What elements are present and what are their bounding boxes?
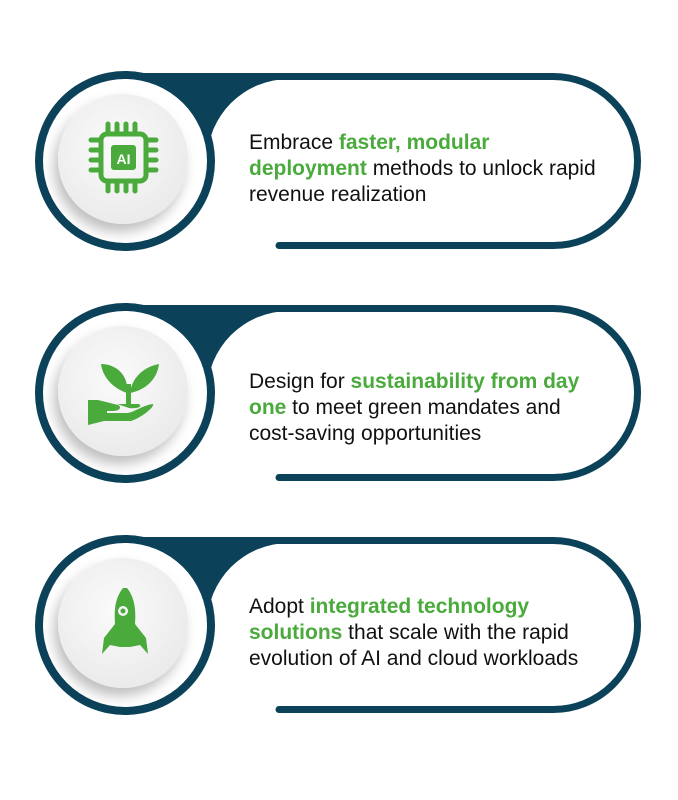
text 3 [249,595,578,670]
icon: AI chip [91,124,156,191]
text 2: Design for sustainability from day [249,370,579,393]
text 1: revenue realization [249,183,426,206]
text 2: cost-saving opportunities [249,422,481,445]
text 1: deployment methods to unlock rapid [249,157,596,180]
text 3: evolution of AI and cloud workloads [249,647,578,670]
panel 2 frame [35,303,638,483]
text 3: Adopt integrated technology [249,595,529,618]
text 1: Embrace faster, modular [249,131,489,154]
icon: rocket [102,588,148,654]
text 2 [249,370,580,445]
text 1 [249,131,596,206]
text 2: one to meet green mandates and [249,396,561,419]
panel 1 frame [35,71,638,251]
panel 3 frame [35,535,638,715]
icon: AI chip: AI [116,151,130,167]
icon: plant in hand [88,364,159,425]
text 3: solutions that scale with the rapid [249,621,569,644]
